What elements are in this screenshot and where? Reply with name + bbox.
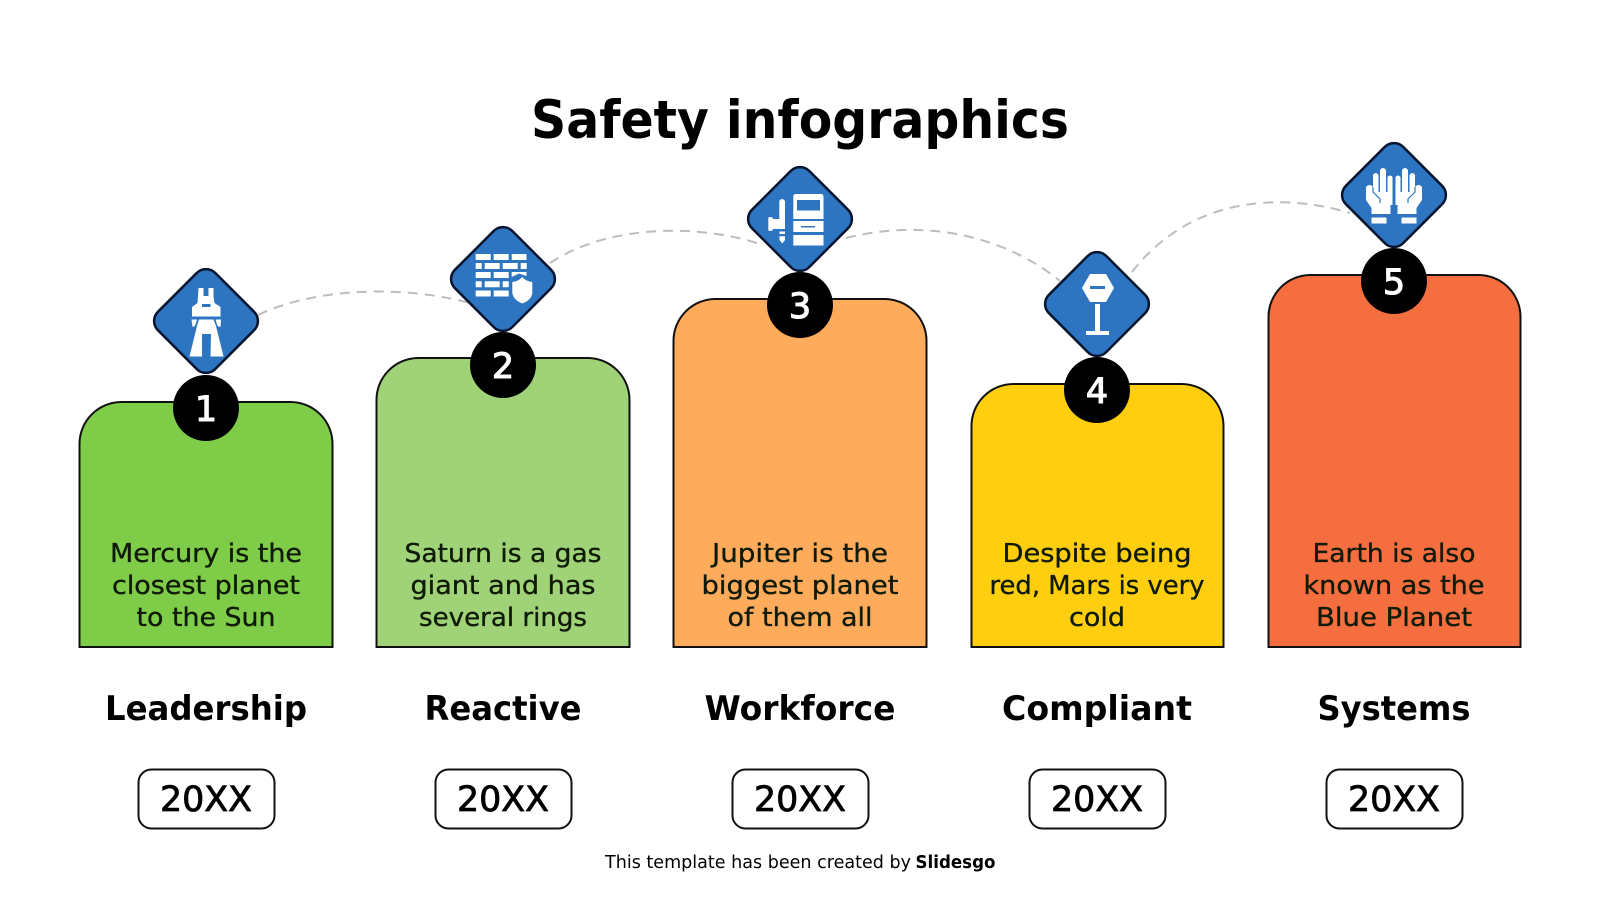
- year badge row: 20XX: [754, 780, 846, 820]
- description text: giant and has: [410, 571, 596, 601]
- green column: [80, 402, 332, 647]
- description text: [110, 539, 302, 633]
- icon: raised safety gloves in blue diamond: [1337, 138, 1451, 252]
- panel: Workforce: [674, 162, 926, 647]
- number badge 5: [1361, 248, 1427, 314]
- year badge row: 20XX: [1348, 780, 1440, 820]
- description text: Saturn is a gas: [404, 539, 602, 569]
- description text: cold: [1069, 603, 1125, 633]
- description text: Jupiter is the: [710, 539, 888, 569]
- footer credit: This template has been created by: [604, 853, 911, 873]
- heading row: Workforce: [704, 689, 896, 729]
- description text: [404, 539, 602, 633]
- description text: red, Mars is very: [990, 571, 1204, 601]
- light green column: [376, 358, 630, 647]
- heading row: Compliant: [1002, 689, 1192, 729]
- description text: Mercury is the: [110, 539, 302, 569]
- dashed connector curves: [258, 202, 1350, 315]
- icon: brick wall with shield in blue diamond: [446, 222, 560, 336]
- year badge row: 20XX: [1051, 780, 1143, 820]
- icon: road sign in blue diamond: [1040, 247, 1154, 361]
- panel: Systems: [1268, 138, 1520, 647]
- heading row: [105, 689, 1470, 729]
- heading row: Leadership: [105, 689, 307, 729]
- orange column: [674, 299, 926, 647]
- number badge 1: 1: [195, 390, 217, 430]
- panel: Compliant: [972, 247, 1224, 647]
- icon: overalls in blue diamond: [149, 264, 263, 378]
- year badge row: [138, 770, 1462, 828]
- yellow column: [972, 384, 1224, 647]
- panel: Leadership: [80, 264, 332, 647]
- red-orange column: [1268, 275, 1520, 647]
- description text: [990, 539, 1204, 633]
- description text: known as the: [1304, 571, 1484, 601]
- number badge 3: 3: [789, 287, 811, 327]
- icon: safety station in blue diamond: [743, 162, 857, 276]
- number badge 4: 4: [1086, 372, 1108, 412]
- panel: Reactive: [376, 222, 630, 647]
- number badge 1: [173, 375, 239, 441]
- heading row: Reactive: [424, 689, 582, 729]
- description text: Despite being: [1002, 539, 1192, 569]
- description text: several rings: [419, 603, 587, 633]
- description text: Earth is also: [1312, 539, 1476, 569]
- description text: to the Sun: [136, 603, 276, 633]
- description text: Blue Planet: [1316, 603, 1472, 633]
- number badge 4: [1064, 357, 1130, 423]
- description text: of them all: [728, 603, 872, 633]
- title: Safety infographics: [531, 90, 1069, 151]
- description text: closest planet: [112, 571, 300, 601]
- description text: [702, 539, 898, 633]
- footer credit: Slidesgo: [916, 853, 996, 873]
- number badge 5: 5: [1383, 263, 1405, 303]
- description text: biggest planet: [702, 571, 898, 601]
- year badge row: 20XX: [160, 780, 252, 820]
- number badge 2: [470, 332, 536, 398]
- number badge 3: [767, 272, 833, 338]
- number badge 2: 2: [492, 347, 514, 387]
- description text: [1304, 539, 1484, 633]
- heading row: Systems: [1318, 689, 1470, 729]
- year badge row: 20XX: [457, 780, 549, 820]
